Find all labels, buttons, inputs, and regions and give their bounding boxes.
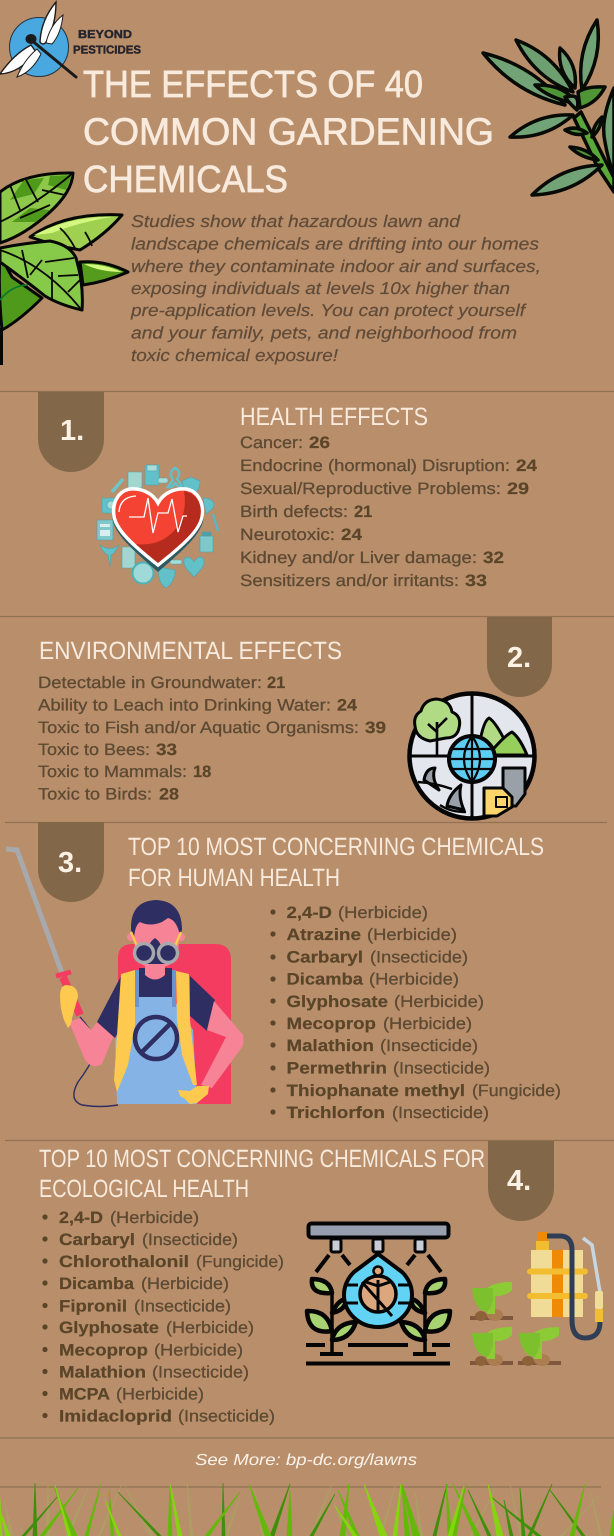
icon: backpack sprayer [530,1232,603,1338]
illustration: rosemary sprig top right [483,20,614,195]
section: health effects: 26 [309,434,330,452]
list: top 10 ecological health: Imidacloprid [59,1408,172,1426]
illustration: man with sprayer [6,849,244,1106]
list: top 10 ecological health: (Insecticide) [142,1231,238,1249]
logo: Beyond Pesticides: PESTICIDES [73,44,141,56]
section: health effects: 21 [354,503,372,521]
logo: Beyond Pesticides: BEYOND [78,29,132,41]
section: health effects: Neurotoxic: [240,526,335,544]
list: top 10 ecological health: Carbaryl [59,1231,135,1249]
section: environmental effects: Toxic to Fish and/or Aquatic Organisms: [38,719,359,737]
section: health effects [240,403,538,590]
tab: 2 [487,617,552,697]
intro text block: exposing individuals at levels 10x higher than [131,279,510,298]
list: top 10 human health: (Fungicide) [472,1082,561,1100]
tab: 3 [38,822,104,902]
list: top 10 human health: Carbaryl [286,948,363,966]
section: environmental effects: 24 [337,696,358,714]
list: top 10 human health: Glyphosate [286,993,388,1011]
section: health effects: HEALTH EFFECTS [240,403,428,431]
list: top 10 ecological health: Glyphosate [59,1319,159,1337]
list: top 10 human health: (Herbicide) [369,970,459,988]
list: top 10 human health: (Herbicide) [383,1015,472,1033]
section heading: ecological health: ECOLOGICAL HEALTH [39,1175,249,1203]
section: environmental effects: ENVIRONMENTAL EFFECTS [39,637,342,665]
list: top 10 ecological health: Malathion [59,1364,146,1382]
list: top 10 human health: Dicamba [286,970,364,988]
tab: 4: 4. [507,1165,531,1197]
list: top 10 ecological health: (Herbicide) [116,1386,204,1404]
section: environmental effects: 18 [193,763,211,781]
list: top 10 human health: (Insecticide) [393,1060,490,1078]
list: top 10 ecological health: (Herbicide) [141,1275,229,1293]
section: health effects: 24 [516,457,538,475]
list: top 10 human health: Malathion [286,1037,374,1055]
list: top 10 ecological health: Mecoprop [59,1342,148,1360]
section: environmental effects: Toxic to Birds: [38,786,152,804]
intro text block: and your family, pets, and neighborhood from [131,324,517,342]
title: THE EFFECTS OF 40 [83,64,423,106]
tab: 3: 3. [58,847,82,879]
list: top 10 ecological health: Fipronil [59,1298,127,1316]
icon: seedlings [470,1282,561,1366]
section heading: human health: TOP 10 MOST CONCERNING CHEMICALS [128,833,544,861]
list: top 10 human health: (Herbicide) [338,904,428,922]
tab: 1: 1. [60,415,84,447]
list: top 10 ecological health: (Insecticide) [152,1364,249,1382]
section: health effects: 24 [341,526,363,544]
section: health effects: 29 [507,480,529,498]
title: COMMON GARDENING [83,112,494,154]
list: top 10 ecological health: 2,4-D [59,1209,103,1227]
list: top 10 human health: (Herbicide) [367,926,457,944]
list: top 10 human health: Mecoprop [286,1015,376,1033]
tab: 4 [488,1141,554,1221]
illustration: green leaves left [0,173,128,365]
list: top 10 ecological health: MCPA [59,1386,110,1404]
list: top 10 human health: (Insecticide) [392,1104,489,1122]
list: top 10 human health: Thiophanate methyl [286,1082,465,1100]
section: environmental effects [38,637,386,804]
section heading: ecological health [39,1145,485,1203]
illustration: grass [0,1482,614,1536]
list: top 10 human health: (Insecticide) [370,948,468,966]
list: top 10 human health: Permethrin [286,1060,387,1078]
title: CHEMICALS [83,159,288,201]
icon: irrigation with pest drop [306,1224,450,1364]
intro text block: where they contaminate indoor air and surfaces, [131,257,541,276]
footer link text: See More: bp-dc.org/lawns [195,1452,417,1469]
list: top 10 human health: (Insecticide) [380,1037,478,1055]
list: top 10 ecological health: Chlorothalonil [59,1253,189,1271]
tab: 2: 2. [507,642,531,674]
section: environmental effects: 21 [267,674,285,692]
intro text block: Studies show that hazardous lawn and [131,212,461,231]
list: top 10 human health: 2,4-D [286,904,332,922]
title [83,64,494,201]
section: environmental effects: Detectable in Groundwater: [38,674,262,692]
list: top 10 human health: (Herbicide) [394,993,484,1011]
list: top 10 ecological health [42,1209,284,1426]
list: top 10 human health: Trichlorfon [286,1104,385,1122]
section: health effects: Endocrine (hormonal) Disruption: [240,457,510,475]
section: health effects: 32 [483,549,504,567]
list: top 10 ecological health: (Herbicide) [154,1342,243,1360]
section: health effects: 33 [465,572,487,590]
list: top 10 ecological health: Dicamba [59,1275,135,1293]
illustration: heart with medical icons [97,465,218,588]
intro text block [130,212,541,365]
intro text block: pre-application levels. You can protect yourself [130,301,528,320]
intro text block: landscape chemicals are drifting into our homes [131,234,540,254]
section: environmental effects: Toxic to Mammals: [38,763,187,781]
list: top 10 human health: Atrazine [286,926,361,944]
list: top 10 ecological health: (Insecticide) [178,1408,275,1426]
icon: environment globe circle [410,694,534,818]
intro text block: toxic chemical exposure! [131,346,338,365]
section: environmental effects: 39 [365,719,386,737]
list: top 10 ecological health: (Fungicide) [196,1253,284,1271]
section: health effects: Cancer: [240,434,303,452]
list: top 10 ecological health: (Herbicide) [166,1319,254,1337]
logo: Beyond Pesticides [0,2,141,77]
section: health effects: Kidney and/or Liver damage: [240,549,477,567]
section: environmental effects: Toxic to Bees: [38,741,150,759]
section: environmental effects: 28 [159,786,179,804]
list: top 10 human health [270,904,561,1122]
section: health effects: Birth defects: [240,503,348,521]
section heading: human health: FOR HUMAN HEALTH [128,864,340,892]
list: top 10 ecological health: (Insecticide) [134,1298,231,1316]
list: top 10 ecological health: (Herbicide) [110,1209,199,1227]
section heading: human health [128,833,544,892]
tab: 1 [38,392,104,472]
section heading: ecological health: TOP 10 MOST CONCERNING CHEMICALS FOR [39,1145,485,1173]
section: health effects: Sensitizers and/or irritants: [240,572,459,590]
section: environmental effects: Ability to Leach into Drinking Water: [38,696,331,714]
section: environmental effects: 33 [156,741,177,759]
section: health effects: Sexual/Reproductive Problems: [240,480,501,498]
